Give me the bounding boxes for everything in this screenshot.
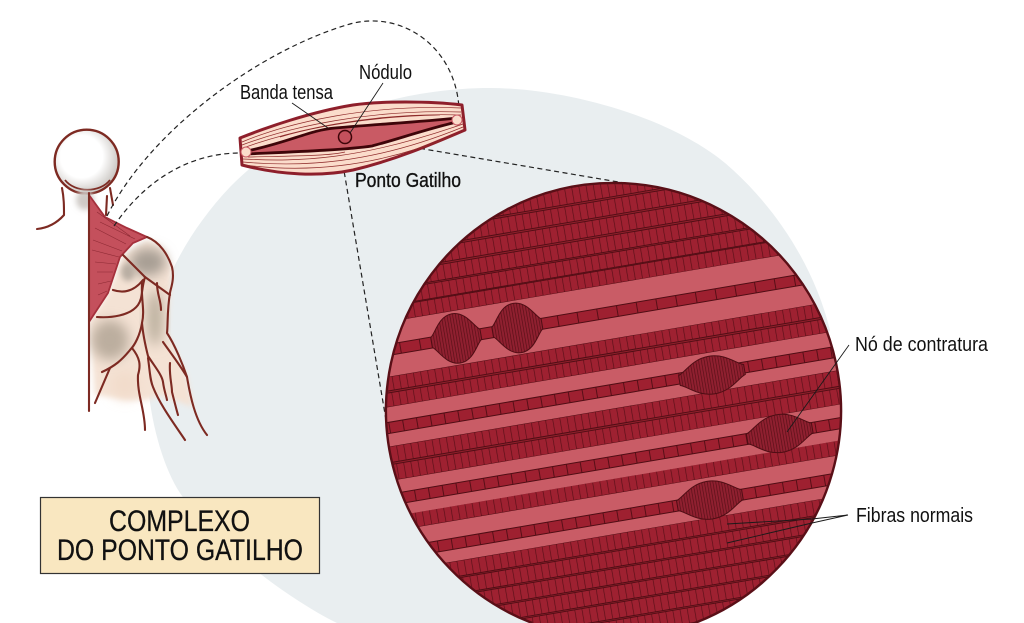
- dashed connector: neck to muscle upper: [107, 21, 459, 216]
- title line 1: COMPLEXO: [109, 505, 250, 538]
- leader lines to labels: [292, 83, 849, 543]
- fibre field: [387, 184, 840, 623]
- dashed connector: neck to muscle lower: [114, 153, 240, 226]
- contraction knot 5: [676, 480, 744, 520]
- normal fibre rows: [387, 184, 840, 623]
- attachment points: [241, 147, 251, 157]
- taut band: [247, 118, 457, 154]
- head: [55, 130, 119, 210]
- dashed connector: nodule to zoom top edge: [353, 137, 642, 186]
- nodule: [338, 130, 352, 144]
- label: Banda tensa: Banda tensa: [240, 82, 334, 104]
- zoomed muscle fibres circle: [384, 182, 842, 623]
- body figure with trapezius muscle: [37, 130, 207, 440]
- label: Nó de contratura: Nó de contratura: [855, 334, 989, 356]
- label: Ponto Gatilho: Ponto Gatilho: [355, 170, 461, 192]
- anatomy contour lines: [37, 188, 207, 440]
- muscle belly: [240, 102, 465, 174]
- contraction knot 3: [678, 355, 746, 395]
- contraction knot 1: [430, 313, 482, 364]
- label: Fibras normais: Fibras normais: [856, 505, 973, 527]
- circle outline: [386, 183, 841, 623]
- contraction knot 2: [491, 302, 544, 354]
- label: Nódulo: Nódulo: [359, 62, 412, 84]
- stretched fibre strands: [387, 274, 840, 552]
- dashed connector: nodule to zoom left edge: [340, 147, 386, 420]
- soft skin and shading: [89, 240, 193, 407]
- contracted fibre bands: [387, 256, 840, 563]
- muscle fibres: [242, 107, 463, 168]
- title box: [40, 498, 320, 574]
- contraction knot 4: [746, 414, 814, 454]
- trapezius muscle: [89, 195, 147, 322]
- muscle with taut band: [240, 102, 465, 174]
- title line 2: DO PONTO GATILHO: [57, 534, 303, 567]
- grey background disc: [147, 88, 830, 623]
